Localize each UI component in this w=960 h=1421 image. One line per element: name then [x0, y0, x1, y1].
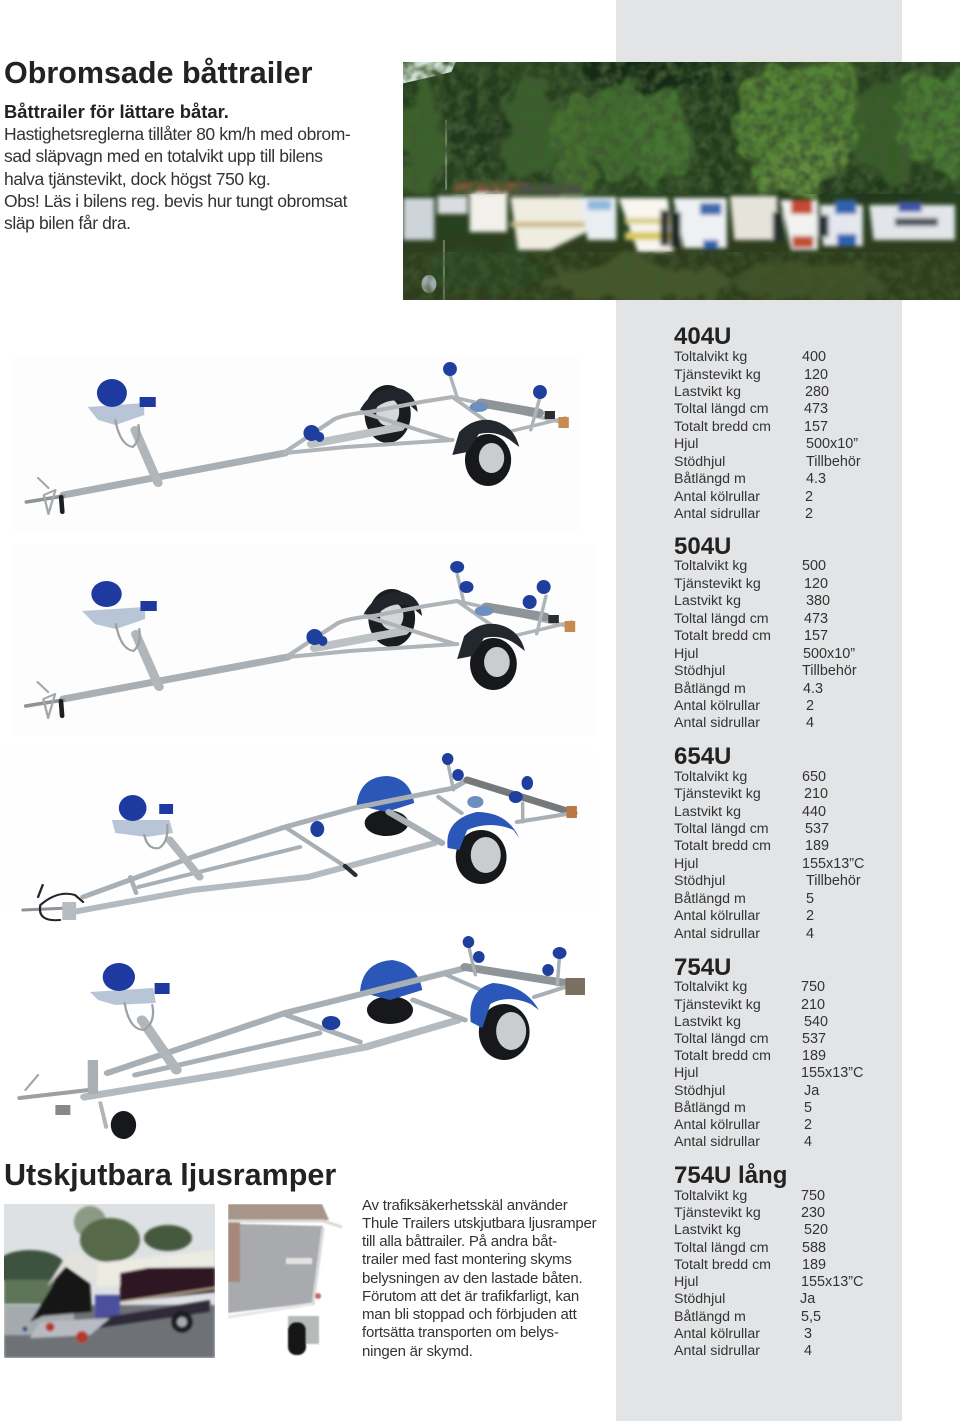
far wheel: [364, 589, 422, 647]
heading: light ramps: Utskjutbara ljusramper: [4, 1158, 336, 1192]
paragraph: light ramps: fortsätta transporten om belys-: [362, 1324, 559, 1341]
text: 540: [804, 1014, 828, 1030]
text: Båtlängd m: [674, 681, 746, 697]
paragraph: light ramps: [362, 1197, 596, 1360]
text: Totalt bredd cm: [674, 419, 771, 435]
text: Stödhjul: [674, 663, 725, 679]
text: Toltal längd cm: [674, 821, 769, 837]
text: Antal kölrullar: [674, 908, 760, 924]
text: Båtlängd m: [674, 471, 746, 487]
text: Lastvikt kg: [674, 593, 741, 609]
text: 120: [804, 576, 828, 592]
text: Ja: [800, 1291, 815, 1307]
text: 189: [802, 1257, 826, 1273]
text: 2: [805, 506, 813, 522]
text: Tillbehör: [806, 454, 861, 470]
text: Hjul: [674, 646, 698, 662]
text: Båtlängd m: [674, 1100, 746, 1116]
intro text block: Båttrailer för lättare båtar.: [4, 101, 229, 122]
trailer illustrations: [17, 362, 585, 1139]
paragraph: light ramps: till alla båttrailer. På andra båt-: [362, 1233, 557, 1250]
text: 654U: [674, 743, 731, 770]
paragraph: light ramps: trailer med fast montering skyms: [362, 1251, 572, 1268]
text: Antal sidrullar: [674, 1134, 760, 1150]
text: Antal sidrullar: [674, 715, 760, 731]
winch: [112, 795, 200, 877]
coupler and jockey wheel: [20, 1060, 136, 1139]
trailer 654U: [23, 753, 577, 920]
text: 537: [802, 1031, 826, 1047]
text: 157: [804, 628, 828, 644]
text: Toltal längd cm: [674, 1240, 769, 1256]
trailer 404U: [27, 362, 569, 514]
text: Ja: [804, 1083, 819, 1099]
text: 3: [804, 1326, 812, 1342]
paragraph: light ramps: Thule Trailers utskjutbara ljusramper: [362, 1215, 596, 1232]
text: Antal sidrullar: [674, 1343, 760, 1359]
coupler: [27, 478, 63, 514]
text: 155x13”C: [801, 1065, 863, 1081]
trailer 754U: [20, 936, 585, 1139]
trailer 504U: [26, 561, 575, 718]
text: 4: [806, 926, 814, 942]
text: 4: [804, 1343, 812, 1359]
text: Toltal längd cm: [674, 1031, 769, 1047]
far wheel: [360, 960, 422, 1024]
rear coupling end: [565, 978, 585, 995]
paragraph: light ramps: man bli stoppad och förbjuden att: [362, 1306, 577, 1323]
text: 2: [806, 908, 814, 924]
spec: 504U: [674, 533, 857, 731]
text: Antal kölrullar: [674, 489, 760, 505]
intro text block: Hastighetsreglerna tillåter 80 km/h med obrom-: [4, 124, 350, 144]
near wheel: [452, 420, 519, 486]
text: Toltalvikt kg: [674, 979, 747, 995]
text: Stödhjul: [674, 873, 725, 889]
text: 650: [802, 769, 826, 785]
text: Antal kölrullar: [674, 1326, 760, 1342]
text: Toltalvikt kg: [674, 1188, 747, 1204]
text: Lastvikt kg: [674, 1222, 741, 1238]
text: 400: [802, 349, 826, 365]
text: Toltalvikt kg: [674, 769, 747, 785]
near wheel: [470, 983, 539, 1060]
text: 155x13”C: [802, 856, 864, 872]
paragraph: light ramps: Av trafiksäkerhetsskäl använder: [362, 1197, 568, 1214]
text: 189: [805, 838, 829, 854]
text: 473: [804, 611, 828, 627]
intro text block: sad släpvagn med en totalvikt upp till bilens: [4, 146, 323, 166]
text: Antal kölrullar: [674, 1117, 760, 1133]
grey side band: [616, 0, 902, 1421]
coupler: [26, 682, 63, 718]
text: 4.3: [806, 471, 826, 487]
text: 754U lång: [674, 1162, 787, 1189]
text: Hjul: [674, 1274, 698, 1290]
text: 750: [801, 1188, 825, 1204]
filler sky patch: [400, 62, 456, 84]
text: Tjänstevikt kg: [674, 576, 761, 592]
rollers: [306, 561, 551, 646]
spec: 654U: [674, 743, 864, 942]
coupler: [23, 866, 355, 920]
text: Båtlängd m: [674, 891, 746, 907]
paragraph: light ramps: Förutom att det är trafikfarligt, kan: [362, 1288, 579, 1305]
text: Totalt bredd cm: [674, 838, 771, 854]
text: 5,5: [801, 1309, 821, 1325]
text: 4: [806, 715, 814, 731]
text: 473: [804, 401, 828, 417]
far wheel: [360, 385, 418, 443]
text: Toltal längd cm: [674, 401, 769, 417]
frame: [73, 762, 573, 912]
text: 155x13”C: [801, 1274, 863, 1290]
intro text block: Obs! Läs i bilens reg. bevis hur tungt obromsat: [4, 191, 347, 211]
rollers: [322, 936, 567, 1030]
photo: boat on trailer with ramp: [4, 1204, 215, 1358]
frame: [63, 375, 565, 495]
text: 500x10”: [806, 436, 858, 452]
text: 520: [804, 1222, 828, 1238]
winch: [88, 379, 158, 483]
text: 504U: [674, 533, 731, 560]
taillight: [558, 417, 569, 428]
text: 230: [801, 1205, 825, 1221]
paragraph: light ramps: belysningen av den lastade båten.: [362, 1270, 582, 1287]
text: Tillbehör: [802, 663, 857, 679]
photo: boats moored on a lake: [403, 62, 960, 300]
text: Antal kölrullar: [674, 698, 760, 714]
text: Antal sidrullar: [674, 926, 760, 942]
text: Tillbehör: [806, 873, 861, 889]
text: 210: [801, 997, 825, 1013]
rollers: [303, 362, 547, 442]
text: 380: [806, 593, 830, 609]
text: Stödhjul: [674, 454, 725, 470]
text: 2: [804, 1117, 812, 1133]
text: 754U: [674, 954, 731, 981]
text: 189: [802, 1048, 826, 1064]
near wheel: [447, 812, 519, 884]
text: 280: [805, 384, 829, 400]
text: 750: [801, 979, 825, 995]
text: Stödhjul: [674, 1083, 725, 1099]
text: 537: [805, 821, 829, 837]
text: 588: [802, 1240, 826, 1256]
text: Tjänstevikt kg: [674, 786, 761, 802]
rollers: [310, 753, 533, 837]
text: Toltalvikt kg: [674, 558, 747, 574]
text: 157: [804, 419, 828, 435]
frame: [63, 574, 572, 699]
intro text block: halva tjänstevikt, dock högst 750 kg.: [4, 169, 270, 189]
text: Totalt bredd cm: [674, 628, 771, 644]
spec: 754U lång: [674, 1162, 863, 1359]
text: Tjänstevikt kg: [674, 1205, 761, 1221]
text: Toltalvikt kg: [674, 349, 747, 365]
text: Båtlängd m: [674, 1309, 746, 1325]
photo: trailer rear with ramp light: [228, 1204, 342, 1356]
text: 404U: [674, 323, 731, 350]
frame: [84, 945, 565, 1097]
text: Lastvikt kg: [674, 1014, 741, 1030]
taillight: [567, 806, 577, 818]
text: Totalt bredd cm: [674, 1048, 771, 1064]
spec: 404U: [674, 323, 861, 522]
text: 500x10”: [803, 646, 855, 662]
text: Totalt bredd cm: [674, 1257, 771, 1273]
winch: [82, 581, 159, 687]
text: Stödhjul: [674, 1291, 725, 1307]
far wheel: [357, 776, 414, 836]
text: 5: [806, 891, 814, 907]
text: Antal sidrullar: [674, 506, 760, 522]
winch: [90, 963, 177, 1070]
text: Tjänstevikt kg: [674, 367, 761, 383]
text: Tjänstevikt kg: [674, 997, 761, 1013]
near wheel: [457, 624, 525, 690]
intro text block: [4, 101, 350, 233]
text: 5: [804, 1100, 812, 1116]
title: Obromsade båttrailer: [4, 56, 312, 90]
text: 4.3: [803, 681, 823, 697]
text: Hjul: [674, 856, 698, 872]
text: 440: [802, 804, 826, 820]
text: 120: [804, 367, 828, 383]
text: Lastvikt kg: [674, 804, 741, 820]
text: Lastvikt kg: [674, 384, 741, 400]
paragraph: light ramps: ningen är skymd.: [362, 1343, 473, 1360]
text: 210: [804, 786, 828, 802]
text: 4: [804, 1134, 812, 1150]
faint image backgrounds: [3, 358, 595, 910]
taillight: [565, 621, 575, 632]
text: 500: [802, 558, 826, 574]
text: 2: [805, 489, 813, 505]
text: 2: [806, 698, 814, 714]
intro text block: släp bilen får dra.: [4, 213, 131, 233]
text: Hjul: [674, 1065, 698, 1081]
spec: 754U: [674, 954, 863, 1150]
text: Toltal längd cm: [674, 611, 769, 627]
text: Hjul: [674, 436, 698, 452]
